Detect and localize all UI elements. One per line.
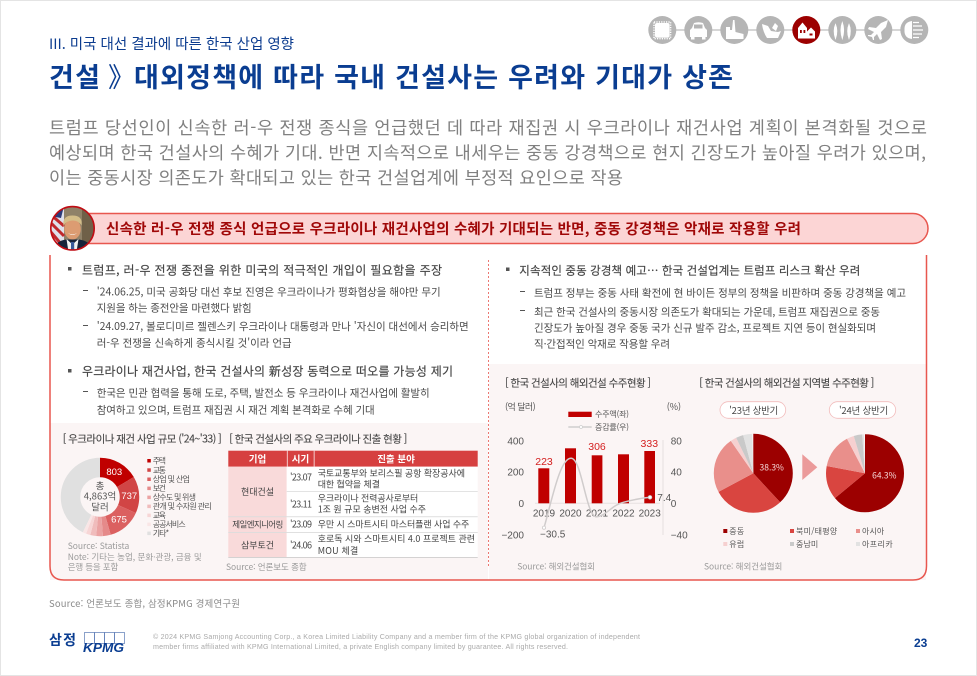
sub bullet 5: 긴장도가 높아질 경우 중동 국가 신규 발주 감소, 프로젝트 지연 등이 현실화되며 — [534, 321, 876, 336]
chart legend: 증감률(우) — [595, 422, 629, 433]
icon: buildings (active) — [792, 16, 820, 44]
icon: fighter jet — [864, 16, 892, 44]
axis units — [505, 400, 681, 413]
bullet heading 2: 우크라이나 재건사업, 한국 건설사의 新성장 동력으로 떠오를 가능성 제기 — [82, 363, 453, 380]
pill 2023: '23년 상반기 — [729, 403, 778, 417]
pie 2023 — [734, 454, 784, 493]
arrow between pies — [802, 454, 817, 480]
pies heading: [ 한국 건설사의 해외건설 지역별 수주현황 ] — [699, 376, 874, 391]
copyright — [153, 633, 640, 651]
growth line — [542, 458, 652, 529]
axes: 200 — [507, 468, 524, 478]
copyright: member firms affiliated with KPMG International Limited, a private English company limited by guarantee. All rights reserved. — [153, 643, 568, 651]
table body: 삼부토건 — [241, 538, 274, 551]
pies legend: 아시아 — [862, 526, 885, 537]
year labels: 2022 — [612, 509, 635, 520]
table heading: [ 한국 건설사의 주요 우크라이나 진출 현황 ] — [229, 432, 407, 447]
pies legend: 아프리카 — [862, 539, 893, 550]
pie 2023: 38.3% — [760, 462, 784, 474]
line values: 7.4 — [657, 493, 672, 504]
bullet heading 1: 트럼프, 러-우 전쟁 종전을 위한 미국의 적극적인 개입이 필요함을 주장 — [82, 262, 442, 278]
sub bullet 3: 한국은 민관 협력을 통해 도로, 주택, 발전소 등 우크라이나 재건사업에 활발히 — [97, 386, 430, 401]
chart heading: [ 한국 건설사의 해외건설 수주현황 ] — [505, 376, 651, 391]
pie 2024 — [846, 454, 897, 493]
sub bullet 3: 참여하고 있으며, 트럼프 재집권 시 재건 계획 본격화로 수혜 기대 — [97, 402, 375, 417]
title: 대외정책에 따라 국내 건설사는 우려와 기대가 상존 — [134, 56, 733, 95]
main panel — [50, 255, 926, 580]
bar values — [535, 438, 658, 468]
donut source note: Note: 기타는 농업, 문화·관광, 금융 및 — [68, 551, 202, 563]
donut centre total: 4,863억 — [84, 488, 116, 502]
table: Korean builders in Ukraine — [226, 432, 478, 573]
pies legend: 중동 — [729, 526, 744, 537]
table body: '23.09 — [290, 518, 312, 530]
intro paragraph: 이는 중동시장 의존도가 확대되고 있는 한국 건설업계에 부정적 요인으로 작용 — [49, 165, 623, 190]
donut — [70, 468, 130, 526]
intro paragraph: 예상되며 한국 건설사의 수혜가 기대. 반면 지속적으로 내세우는 중동 강경책으로 현지 긴장도가 높아질 우려가 있으며, — [49, 140, 926, 165]
pill 2024 — [829, 402, 896, 418]
table body: 우만 시 스마트시티 마스터플랜 사업 수주 — [318, 518, 469, 530]
section label: III. 미국 대선 결과에 따른 한국 산업 영향 — [49, 33, 294, 54]
portrait — [50, 206, 95, 252]
table body — [228, 466, 478, 558]
table source: Source: 언론보도 종합 — [226, 561, 307, 573]
donut source note: Source: Statista — [68, 540, 130, 552]
table header: 시기 — [292, 452, 309, 466]
bars — [538, 448, 655, 503]
legend: 공공서비스 — [153, 519, 186, 530]
axes — [501, 436, 688, 542]
bar values: 333 — [641, 438, 658, 450]
donut source note — [68, 540, 202, 573]
donut labels: 675 — [111, 514, 127, 526]
logo: Samjong KPMG: KPMG — [83, 640, 124, 655]
table header: 진출 분야 — [377, 452, 415, 466]
donut centre total: 달러 — [91, 500, 109, 514]
donut labels — [106, 467, 137, 526]
navigation icons — [648, 16, 928, 44]
year labels — [533, 509, 661, 520]
sub bullet 1: '24.06.25, 미국 공화당 대선 후보 진영은 우크라이나가 평화협상을 해야만 무기 — [97, 285, 441, 300]
table body: 현대건설 — [241, 485, 274, 498]
chart source: Source: 해외건설협회 — [517, 560, 595, 572]
table body: '23.07 — [290, 470, 312, 484]
table header — [228, 451, 478, 467]
chart: Ukraine reconstruction donut — [63, 432, 222, 573]
intro paragraph — [49, 115, 927, 190]
axis units: (%) — [667, 400, 681, 413]
legend: 상업 및 산업 — [153, 474, 190, 485]
pies legend: 중남미 — [796, 539, 818, 550]
table header: 기업 — [249, 452, 266, 466]
sub bullet 3 — [83, 386, 430, 417]
year labels: 2019 — [533, 509, 556, 520]
intro paragraph: 트럼프 당선인이 신속한 러-우 전쟁 종식을 언급했던 데 따라 재집권 시 우크라이나 재건사업 계획이 본격화될 것으로 — [49, 115, 927, 140]
right text block — [506, 262, 906, 352]
axes: 80 — [671, 436, 682, 448]
table body: 대한 협약을 체결 — [318, 478, 380, 490]
table body: '23.11 — [290, 497, 312, 510]
line values — [540, 493, 672, 541]
pie 2024: 64.3% — [872, 470, 897, 482]
table body: MOU 체결 — [318, 544, 358, 557]
bar values: 223 — [535, 456, 553, 468]
legend: 상수도 및 위생 — [153, 492, 196, 503]
logo: Samjong KPMG: 삼정 — [49, 630, 76, 650]
icon: car — [684, 16, 712, 44]
title: 건설 — [49, 56, 100, 95]
axes: 40 — [671, 468, 682, 478]
donut labels: 737 — [121, 491, 137, 502]
logo: Samjong KPMG — [49, 630, 124, 655]
axis units: (억 달러) — [505, 400, 536, 413]
icon: factory — [720, 16, 748, 44]
sub bullet 2: '24.09.27, 볼로디미르 젤렌스키 우크라이나 대통령과 만나 '자신이 대선에서 승리하면 — [97, 319, 469, 334]
chart legend — [568, 409, 629, 433]
legend — [147, 456, 212, 539]
table body: 제일엔지니어링 — [232, 518, 283, 530]
callout bar — [72, 214, 928, 244]
axes: 0 — [518, 499, 524, 510]
donut labels: 803 — [106, 467, 122, 478]
bar values: 306 — [588, 441, 606, 453]
sub bullet 5: 최근 한국 건설사의 중동시장 의존도가 확대되는 가운데, 트럼프 재집권으로 중동 — [534, 305, 880, 320]
table body: 1조 원 규모 송변전 사업 수주 — [318, 502, 426, 516]
page number: 23 — [914, 636, 928, 650]
page source: Source: 언론보도 종합, 삼정KPMG 경제연구원 — [49, 596, 240, 610]
title: 》 — [108, 56, 135, 95]
year labels: 2021 — [586, 509, 609, 520]
sub bullet 5: 직·간접적인 악재로 작용할 우려 — [534, 337, 670, 352]
legend: 관개 및 수자원 관리 — [153, 501, 212, 512]
table body: 우크라이나 전력공사로부터 — [318, 492, 418, 504]
pies source: Source: 해외건설협회 — [704, 560, 782, 572]
legend: 교육 — [153, 510, 166, 521]
icon: chip — [648, 16, 676, 44]
sub bullet 4: 트럼프 정부는 중동 사태 확전에 현 바이든 정부의 정책을 비판하며 중동 강경책을 예고 — [534, 286, 906, 301]
chart legend: 수주액(좌) — [595, 409, 629, 420]
icon: brain circuit — [900, 16, 928, 44]
legend: 기타* — [153, 528, 170, 539]
legend: 보건 — [153, 483, 166, 494]
axes: 400 — [507, 436, 524, 448]
year labels: 2023 — [639, 509, 661, 520]
legend: 주택 — [153, 456, 166, 466]
chart: regional orders pies — [699, 376, 897, 572]
table body: 국토교통부와 보리스필 공항 확장공사에 — [318, 466, 465, 480]
pill 2024: '24년 상반기 — [839, 403, 888, 417]
axes: −200 — [501, 530, 524, 542]
sub bullet 1 — [83, 285, 441, 316]
icon: ship — [756, 16, 784, 44]
icon: wheat — [828, 16, 856, 44]
donut source note: 은행 등을 포함 — [68, 561, 118, 573]
sub bullet 1: 지원을 하는 종전안을 마련했다 밝힘 — [97, 301, 252, 316]
callout bar: 신속한 러-우 전쟁 종식 언급으로 우크라이나 재건사업의 수혜가 기대되는 반면, 중동 강경책은 악재로 작용할 우려 — [106, 218, 801, 239]
sub bullet 2: 러-우 전쟁을 신속하게 종식시킬 것'이라 언급 — [97, 336, 292, 351]
legend: 교통 — [153, 465, 166, 476]
sub bullet 5 — [520, 305, 880, 352]
axes: −40 — [671, 530, 688, 542]
copyright: © 2024 KPMG Samjong Accounting Corp., a Korea Limited Liability Company and a member firm of the KPMG global organization of independent — [153, 633, 640, 641]
table body: 호로독 시와 스마트시티 4.0 프로젝트 관련 — [318, 532, 475, 545]
sub bullet 2 — [83, 319, 469, 351]
axes: 0 — [671, 499, 677, 510]
line values: −30.5 — [540, 530, 566, 541]
heading: [ 우크라이나 재건 사업 규모 ('24~'33) ] — [63, 432, 222, 447]
year labels: 2020 — [559, 509, 582, 520]
pies legend: 유럽 — [729, 539, 744, 550]
left text block — [68, 262, 469, 417]
table body: '24.06 — [290, 538, 312, 551]
pill 2023 — [720, 402, 786, 418]
donut centre total: 총 — [96, 478, 105, 492]
bullet heading 3: 지속적인 중동 강경책 예고… 한국 건설업계는 트럼프 리스크 확산 우려 — [519, 262, 860, 278]
pies legend: 북미/태평양 — [796, 526, 838, 537]
donut centre total — [84, 478, 116, 514]
pies legend — [723, 526, 893, 550]
chart: overseas orders bar and line — [501, 376, 688, 572]
